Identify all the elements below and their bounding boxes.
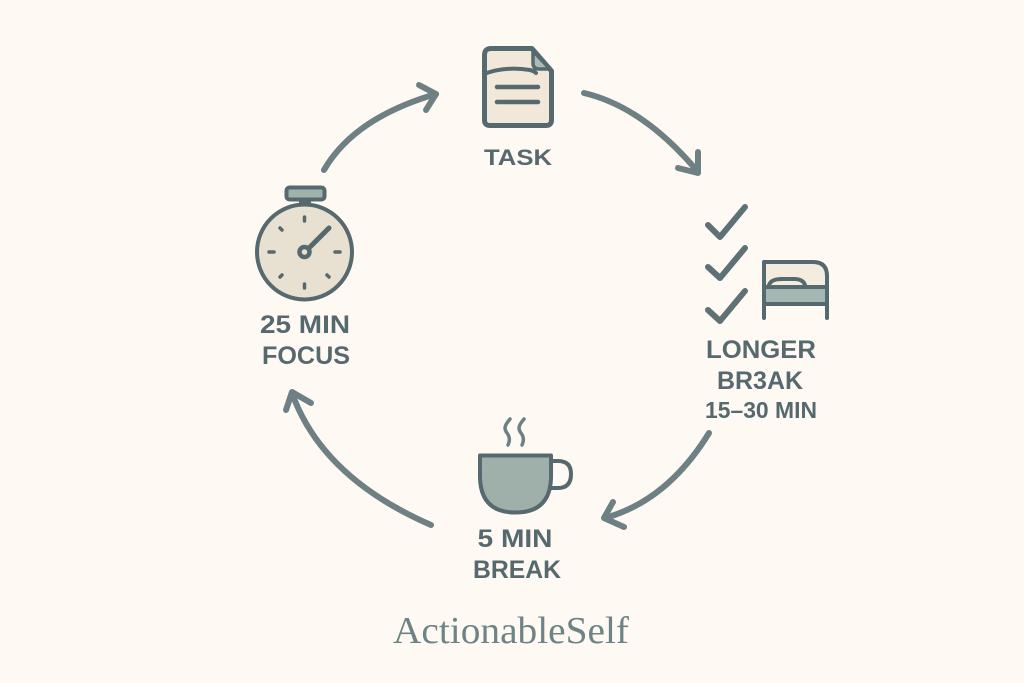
label: 5 min break: 5 MIN [478, 525, 552, 553]
label: 25 min focus [260, 311, 350, 370]
icon: bed [764, 262, 827, 318]
icon: steam [505, 419, 524, 445]
arrow: longer break to 5 min break [604, 433, 709, 527]
label: task: TASK [484, 145, 552, 170]
label: longer break: 15–30 MIN [705, 397, 817, 423]
arrow: 5 min break to focus [286, 392, 431, 525]
label: longer break: BR3AK [717, 367, 803, 395]
label: 5 min break: BREAK [473, 556, 561, 584]
icon: document [484, 48, 552, 126]
arrow: focus to task [324, 85, 436, 170]
label: longer break: LONGER [706, 336, 816, 364]
label: longer break [705, 336, 817, 423]
node: task [484, 48, 552, 170]
label: 25 min focus: FOCUS [262, 342, 350, 370]
icon: stopwatch [257, 188, 352, 300]
label: 25 min focus: 25 MIN [260, 311, 350, 339]
node: 5 min break [473, 419, 571, 584]
brand name: ActionableSelf [393, 610, 629, 652]
arrow: task to longer break [584, 93, 698, 173]
icon: coffee cup [480, 456, 571, 512]
icon: checkmarks [708, 207, 745, 321]
node: 25 min focus [257, 188, 352, 370]
label: 5 min break [473, 525, 561, 584]
node: longer break [705, 207, 827, 423]
